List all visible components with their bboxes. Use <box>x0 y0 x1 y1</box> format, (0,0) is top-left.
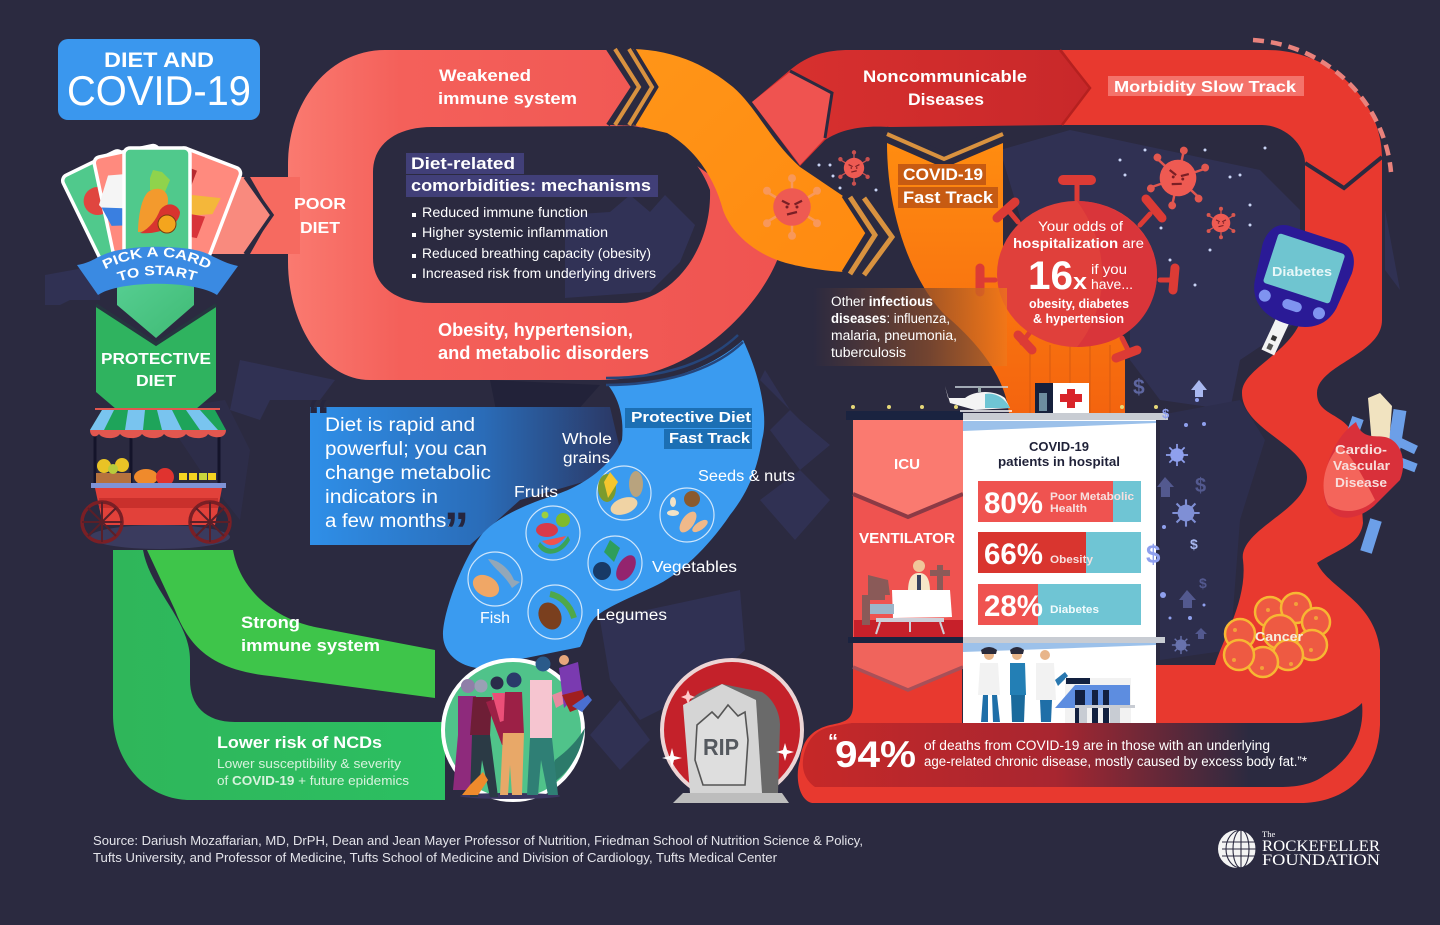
text: hospitalization odds: Your odds of <box>1038 219 1123 234</box>
logo: rockefeller foundation: ROCKEFELLER <box>1262 838 1380 855</box>
banner: 94 percent: age-related chronic disease, mostly caused by excess body fat.”* <box>924 754 1308 769</box>
banner: 94 percent: 94% <box>835 734 916 775</box>
logo: rockefeller foundation: The <box>1262 829 1275 839</box>
economic cost symbols: $ <box>1195 475 1206 497</box>
stat bar: 66 percent <box>978 532 1141 573</box>
title: DIET AND <box>104 49 214 72</box>
panel: comorbidities mechanisms <box>406 153 658 281</box>
text: strong immune system: immune system <box>241 636 380 655</box>
economic cost symbols: $ <box>1133 376 1145 399</box>
band: noncommunicable diseases <box>752 50 1090 166</box>
stat bar: 28 percent: Diabetes <box>1050 604 1099 616</box>
icon: medical staff <box>978 647 1068 722</box>
banner: 94 percent: “ <box>828 731 838 753</box>
text: noncommunicable diseases <box>863 67 1027 109</box>
title: COVID-19 <box>67 67 251 114</box>
economic cost symbols: $ <box>1190 536 1198 552</box>
text: covid-19 patients in hospital: COVID-19 <box>1029 439 1089 454</box>
food labels <box>480 431 795 627</box>
icon: hospital entrance <box>1055 678 1135 723</box>
economic cost symbols: $ <box>1162 406 1170 421</box>
text: obesity hypertension <box>438 320 649 363</box>
source note <box>93 834 863 865</box>
heading: poor diet <box>294 196 346 237</box>
stat bar: 80 percent <box>978 481 1141 522</box>
quote box: indicators in <box>325 487 438 508</box>
background map shapes <box>45 130 1400 770</box>
label: covid-19 fast track <box>898 164 998 208</box>
icon: small virus <box>839 151 869 185</box>
food labels: grains <box>563 450 610 467</box>
stat bar: 66 percent: Obesity <box>1050 554 1094 566</box>
protective diet arrow: PROTECTIVE <box>101 351 211 368</box>
text: lower risk of NCDs: Lower risk of NCDs <box>217 733 382 752</box>
card: salmon fish <box>89 144 183 276</box>
food labels: Legumes <box>596 607 667 624</box>
icon: vegetables <box>588 536 642 590</box>
icon: ventilator patient <box>854 560 963 637</box>
text: weakened immune system: immune system <box>438 89 577 108</box>
text: hospitalization odds: & hypertension <box>1033 312 1124 326</box>
panel: comorbidities mechanisms: Higher systemic inflammation <box>422 225 608 240</box>
panel: comorbidities mechanisms: Increased risk from underlying drivers <box>422 266 656 281</box>
panel: comorbidities mechanisms: Reduced breathing capacity (obesity) <box>422 246 651 261</box>
card: salmon fries <box>138 146 242 282</box>
text: lower risk of NCDs: Lower susceptibility & severity <box>217 756 402 771</box>
stat bar: 28 percent <box>978 584 1141 625</box>
hospital left wing: ICU and ventilator <box>846 411 963 690</box>
icon: fruits <box>526 506 580 560</box>
icon: small virus right <box>1207 207 1235 239</box>
protective diet arrow <box>96 275 216 409</box>
banner: pick a card <box>77 246 238 295</box>
hospital main building <box>963 413 1168 723</box>
quote box <box>307 390 625 558</box>
text: weakened immune system <box>438 66 577 108</box>
icon: cancer cells <box>1224 593 1330 677</box>
text: obesity hypertension: and metabolic disorders <box>438 343 649 363</box>
label: protective diet fast track: Fast Track <box>669 430 751 447</box>
icon: fish <box>468 552 522 606</box>
icon: heart <box>1324 393 1416 552</box>
band: morbidity slow track and lower red path <box>798 50 1382 803</box>
icon: large virus <box>1145 142 1211 214</box>
logo: rockefeller foundation <box>1218 829 1381 869</box>
food labels: Fish <box>480 610 510 627</box>
text: noncommunicable diseases: Noncommunicable <box>863 67 1027 86</box>
inner dark panel <box>373 126 710 303</box>
quote box: powerful; you can <box>325 439 487 460</box>
economic cost symbols: $ <box>1199 575 1207 591</box>
logo: rockefeller foundation: FOUNDATION <box>1262 852 1381 869</box>
text: noncommunicable diseases: Diseases <box>908 90 984 109</box>
text: obesity hypertension: Obesity, hypertension, <box>438 320 633 340</box>
source note: Source: Dariush Mozaffarian, MD, DrPH, Dean and Jean Mayer Professor of Nutrition, Friedman School of Nutrition Science & Policy, <box>93 834 863 848</box>
icon: family <box>443 655 592 800</box>
text: covid-19 patients in hospital <box>998 439 1120 469</box>
icon: stopwatch <box>980 180 1175 358</box>
text: hospitalization odds: x <box>1073 269 1088 294</box>
banner: pick a card: PICK A CARD <box>102 247 210 269</box>
quote box: ” <box>444 502 469 558</box>
icon: helicopter <box>945 386 1012 411</box>
text: lower risk of NCDs: of COVID-19 + future epidemics <box>217 773 410 788</box>
text: hospitalization odds: obesity, diabetes <box>1029 297 1129 311</box>
band: covid-19 fast track <box>887 128 1125 413</box>
stat bar: 28 percent: 28% <box>984 590 1043 623</box>
icon: whole grains <box>597 466 651 520</box>
source note: Tufts University, and Professor of Medicine, Tufts School of Medicine and Division of Cardiology, Tufts Medical Center <box>93 851 777 865</box>
stat bar: 80 percent: 80% <box>984 487 1043 520</box>
quote box: a few months. <box>325 511 452 532</box>
food labels: Vegetables <box>652 559 737 576</box>
quote box: change metabolic <box>325 463 491 484</box>
text: strong immune system <box>241 613 380 655</box>
card fan <box>61 144 242 286</box>
connector: poor diet arrow <box>205 177 300 254</box>
text: strong immune system: Strong <box>241 613 300 632</box>
callout: other infectious diseases: Other infectious <box>831 294 933 309</box>
roof lights <box>851 405 1158 409</box>
icon: heart: Cardio- <box>1335 442 1387 457</box>
card: green tomato <box>61 149 173 286</box>
text: hospitalization odds: hospitalization are <box>1013 235 1144 251</box>
food labels: Whole <box>562 431 612 448</box>
heading: poor diet: DIET <box>300 220 340 237</box>
hex shapes in dark panel <box>565 195 695 298</box>
quote box: Diet is rapid and <box>325 415 475 436</box>
economic cost symbols <box>1133 376 1207 654</box>
label: morbidity slow track <box>1108 76 1304 96</box>
protective diet arrow: DIET <box>136 373 176 390</box>
banner: 94 percent <box>803 703 1362 787</box>
text: hospitalization odds: if you <box>1091 261 1127 277</box>
icon: seeds and nuts <box>660 488 714 542</box>
stat bar: 80 percent: Health <box>1050 503 1087 515</box>
text: hospitalization odds <box>1013 219 1144 326</box>
icon: RIP gravestone: RIP <box>703 734 739 760</box>
label: protective diet fast track: Protective Diet <box>631 409 751 426</box>
icon: glucose meter: Diabetes <box>1272 264 1332 279</box>
icon: heart: Vascular <box>1333 458 1390 473</box>
banner: pick a card: TO START <box>116 266 198 280</box>
callout: other infectious diseases: tuberculosis <box>831 345 906 360</box>
panel: comorbidities mechanisms: Diet-related <box>411 154 515 173</box>
title <box>58 39 260 120</box>
icon: virus on orange path <box>764 176 820 238</box>
callout: other infectious diseases: malaria, pneumonia, <box>831 328 957 343</box>
panel: comorbidities mechanisms: Reduced immune function <box>422 205 588 220</box>
icon: heart: Disease <box>1335 475 1387 490</box>
stat bar: 66 percent: 66% <box>984 538 1043 571</box>
heading: poor diet: POOR <box>294 196 346 213</box>
callout: other infectious diseases: diseases: influenza, <box>831 311 950 326</box>
hospital left wing: ICU and ventilator: ICU <box>894 456 920 473</box>
band: orange connector <box>608 49 892 275</box>
divider chevron on slow track <box>1305 157 1382 188</box>
quote box: “ <box>307 390 330 442</box>
band: strong immune green <box>147 550 435 698</box>
icon: RIP gravestone <box>662 660 802 803</box>
icon: market cart <box>82 408 230 549</box>
text: covid-19 patients in hospital: patients in hospital <box>998 454 1120 469</box>
band: poor diet coral loop <box>288 50 800 380</box>
economic cost symbols: $ <box>1146 539 1161 569</box>
banner: 94 percent: of deaths from COVID-19 are in those with an underlying <box>924 738 1270 753</box>
hospital left wing: ICU and ventilator: VENTILATOR <box>859 530 955 547</box>
icon: hospital cross sign <box>1035 383 1089 413</box>
icon: legumes <box>528 585 582 639</box>
label: protective diet fast track <box>625 408 752 449</box>
icon: cancer cells: Cancer <box>1255 629 1303 644</box>
band: protective diet blue flow <box>443 335 764 668</box>
text: hospitalization odds: 16 <box>1028 254 1073 298</box>
stat bar: 80 percent: Poor Metabolic <box>1050 491 1134 503</box>
food labels: Seeds & nuts <box>698 468 795 485</box>
icon: glucose meter <box>1241 220 1360 355</box>
dashed route line <box>1253 40 1391 172</box>
band: lower risk green <box>113 550 445 800</box>
panel: comorbidities mechanisms: comorbidities: mechanisms <box>411 176 651 195</box>
text: hospitalization odds: have... <box>1091 276 1133 292</box>
virus particles <box>818 146 1266 286</box>
text: lower risk of NCDs <box>217 733 410 788</box>
label: covid-19 fast track: COVID-19 <box>903 165 983 184</box>
food labels: Fruits <box>514 484 558 501</box>
label: covid-19 fast track: Fast Track <box>903 188 994 207</box>
card: green carrot <box>124 148 190 268</box>
callout: other infectious diseases <box>812 288 1007 366</box>
text: weakened immune system: Weakened <box>439 66 531 85</box>
label: morbidity slow track: Morbidity Slow Track <box>1114 79 1296 96</box>
